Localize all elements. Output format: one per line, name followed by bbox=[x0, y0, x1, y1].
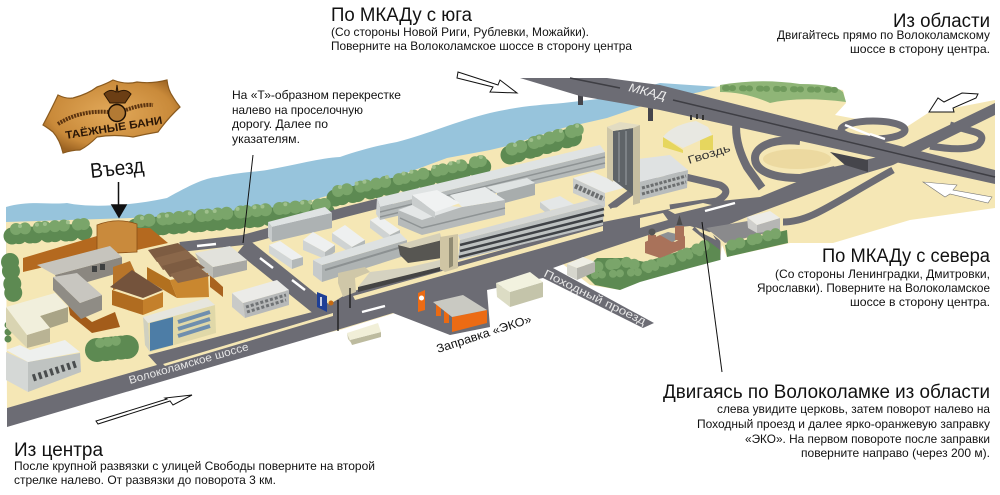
light sand patch bbox=[763, 149, 831, 169]
MKAD median bbox=[570, 78, 995, 177]
text block: T-junction: На «Т»-образном перекрестке bbox=[232, 88, 401, 102]
building: small white block bbox=[747, 211, 780, 233]
building: white ornate building bbox=[6, 340, 81, 392]
text block: from region bbox=[777, 11, 990, 56]
text block: from MKAD south: Поверните на Волоколамское шоссе в сторону центра bbox=[331, 39, 632, 53]
label: Gvozd: Гвоздь bbox=[686, 142, 732, 167]
text block: along Volokolamka from region: Двигаясь по Волоколамке из области bbox=[663, 382, 990, 403]
overpass shadow bbox=[830, 152, 868, 172]
text block: along Volokolamka from region: «ЭКО». На первом повороте после заправки bbox=[745, 432, 990, 446]
arrow: from region bbox=[929, 93, 978, 112]
water bbox=[6, 83, 720, 260]
text block: from center: Из центра bbox=[14, 440, 103, 461]
text block: from MKAD north: По МКАДу с севера bbox=[822, 246, 990, 267]
building: tower with offices bbox=[573, 122, 688, 207]
building: cream box bbox=[496, 272, 543, 307]
text block: from MKAD south: По МКАДу с юга bbox=[331, 5, 472, 26]
text block: from center: стрелке налево. От развязки до поворота 3 км. bbox=[14, 473, 276, 487]
text block: from region: Двигайтесь прямо по Волоколамскому bbox=[777, 28, 990, 42]
building: small gray box on Pokhodny bbox=[567, 257, 595, 280]
text block: along Volokolamka from region: Походный проезд и далее ярко-оранжевую заправку bbox=[697, 417, 990, 431]
gas station bbox=[418, 290, 487, 332]
overpass piers bbox=[578, 93, 653, 121]
top-right green patch bbox=[720, 81, 846, 103]
text block: from MKAD north: шоссе в сторону центра. bbox=[850, 295, 990, 309]
text block: from MKAD south: (Со стороны Новой Риги, Рублевки, Можайки). bbox=[331, 25, 589, 39]
side roads and interchange ramps bbox=[180, 118, 982, 312]
road label: Pokhodny: Походный проезд bbox=[542, 268, 648, 328]
text block: from MKAD north bbox=[757, 246, 990, 309]
building: blue glass office bbox=[143, 298, 216, 352]
building: long glass institute bbox=[338, 198, 604, 297]
text block: from region: шоссе в сторону центра. bbox=[850, 42, 990, 56]
road sign and traffic posts bbox=[317, 288, 350, 331]
logo crown bbox=[104, 85, 131, 103]
text block: from center bbox=[14, 440, 375, 487]
logo badge bbox=[43, 80, 180, 153]
building: small cream box bbox=[347, 323, 381, 345]
text block: along Volokolamka from region bbox=[663, 382, 990, 460]
trees by the highway bbox=[582, 230, 788, 290]
text block: along Volokolamka from region: поверните направо (через 200 м). bbox=[801, 446, 990, 460]
logo name: ТАЁЖНЫЕ БАНИ bbox=[64, 114, 163, 142]
road label: MKAD: МКАД bbox=[627, 80, 668, 103]
arrow: entrance bbox=[112, 182, 126, 217]
leader line: church turn bbox=[702, 222, 722, 372]
road arrows bbox=[197, 108, 885, 312]
main road: Volokolamskoye highway bbox=[7, 103, 995, 427]
leader line: T-junction bbox=[243, 155, 253, 243]
label: EKO gas station: Заправка «ЭКО» bbox=[435, 312, 533, 356]
text block: from MKAD north: Ярославки). Поверните на Волоколамское bbox=[757, 281, 990, 295]
center campus buildings bbox=[268, 145, 605, 282]
church bbox=[645, 215, 685, 258]
building: cream L-block bbox=[6, 293, 68, 348]
building: white office bbox=[232, 280, 289, 318]
sand strips along the road bbox=[163, 203, 716, 366]
building: white warehouse bbox=[195, 246, 247, 278]
building: wooden fence and gate bbox=[23, 221, 223, 333]
entrance label: Въезд bbox=[89, 154, 145, 183]
logo circle bbox=[108, 104, 126, 122]
building: gray L-shaped warehouse bbox=[37, 246, 122, 319]
text block: from center: После крупной развязки с улицей Свободы поверните на второй bbox=[14, 459, 375, 473]
text block: from MKAD south bbox=[331, 5, 632, 53]
arrow: from center bbox=[96, 395, 192, 424]
text block: T-junction bbox=[232, 88, 401, 146]
back tree lines bbox=[8, 88, 838, 345]
arrow: from MKAD south bbox=[457, 72, 517, 93]
arrow: from MKAD north bbox=[923, 182, 992, 203]
bushes bbox=[97, 340, 127, 350]
map illustration bbox=[6, 78, 995, 427]
text block: T-junction: дорогу. Далее по bbox=[232, 117, 328, 131]
road label: Volokolamskoye: Волоколамское шоссе bbox=[128, 341, 250, 387]
logo ornament bbox=[58, 105, 153, 124]
land bbox=[6, 83, 995, 408]
text block: from MKAD north: (Со стороны Ленинградки, Дмитровки, bbox=[775, 267, 990, 281]
MKAD highway bbox=[520, 78, 995, 184]
text block: along Volokolamka from region: слева увидите церковь, затем поворот налево на bbox=[717, 402, 990, 416]
building: wooden bath houses bbox=[110, 243, 210, 315]
building: Gvozd hall bbox=[663, 114, 713, 153]
text block: from region: Из области bbox=[893, 11, 990, 32]
text block: T-junction: налево на проселочную bbox=[232, 103, 363, 117]
text block: T-junction: указателям. bbox=[232, 132, 300, 146]
parking lot bbox=[706, 221, 770, 243]
